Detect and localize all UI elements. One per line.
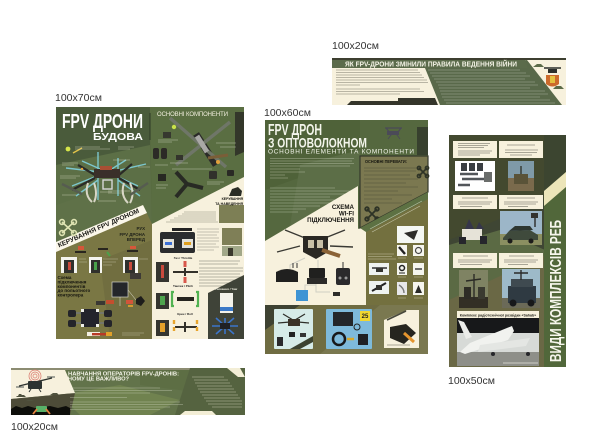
text block: right column (illegible, greeked)	[192, 377, 242, 407]
diagram: radio controller	[160, 228, 195, 253]
heading: forward movement	[119, 226, 146, 242]
corner accent	[235, 112, 244, 156]
heading: poster title	[268, 122, 414, 156]
text block: advice (illegible, greeked)	[199, 261, 243, 286]
panel: main advantages: ОСНОВНІ ПЕРЕВАГИ:	[365, 159, 407, 164]
card: complex 2	[499, 141, 543, 191]
heading: connection diagram: контролера	[58, 293, 84, 298]
heading: connection diagram: до польотного	[58, 288, 90, 293]
diagram: flight controller wiring	[68, 273, 145, 336]
heading: main components: ОСНОВНІ КОМПОНЕНТИ	[157, 112, 228, 118]
heading: vertical title: ВИДИ КОМПЛЕКСІВ РЕБ	[548, 220, 565, 362]
heading: connection diagram	[58, 275, 90, 298]
icon: operator	[229, 187, 242, 196]
heading: Wi-Fi scheme: СХЕМА	[332, 204, 355, 211]
diagram: throttle row: Газ / Throttle	[174, 256, 193, 260]
text block: component captions (illegible, greeked)	[155, 140, 236, 188]
heading: control and guidance: КЕРУВАННЯ	[222, 197, 243, 201]
bar: dark stepped accent	[347, 98, 438, 105]
tile: aircraft close-up	[397, 226, 424, 243]
heading: forward movement: FPV ДРОНА	[119, 232, 146, 237]
icon: X drone	[417, 166, 429, 178]
heading band: ЯК FPV-ДРОНИ ЗМІНИЛИ ПРАВИЛА ВЕДЕННЯ ВІЙНИ	[345, 60, 517, 68]
banner: КЕРУВАННЯ FPV ДРОНОМ: КЕРУВАННЯ FPV ДРОНОМ	[57, 208, 141, 249]
text block: right column (illegible, greeked)	[428, 70, 555, 103]
card: complex 4	[499, 195, 543, 245]
section: cream drone panel	[11, 370, 75, 399]
panel: FPV drone construction poster	[56, 107, 244, 339]
tile: power unit	[384, 310, 419, 348]
icon: controller	[33, 406, 50, 414]
panel: electronic warfare poster	[449, 135, 566, 367]
heading: poster title: ОСНОВНІ ЕЛЕМЕНТИ ТА КОМПОНЕНТИ	[268, 148, 414, 156]
card: complex 3	[453, 195, 497, 244]
diagram: pitch row	[156, 284, 198, 309]
card: complex 1	[453, 141, 497, 191]
panel: FPV fibre-optic drone poster	[265, 120, 429, 354]
diagram: frame and components	[153, 118, 234, 197]
size label: 100x50 poster: 100x50см	[448, 375, 495, 387]
heading: forward movement: РУХ	[136, 226, 145, 231]
tile: drone kit	[274, 309, 313, 349]
size label: 100x60 poster: 100x60см	[264, 107, 311, 119]
section: cream wiring diagram	[265, 186, 366, 305]
photo: operator	[219, 205, 244, 223]
diagram: labelled FPV drone	[62, 147, 148, 203]
text block: left column (illegible, greeked)	[336, 70, 428, 94]
diagram: Wi-Fi wiring	[276, 230, 353, 301]
icon: drone crest	[544, 68, 561, 86]
tile: drone photo 2	[369, 281, 389, 294]
diagram: roll row	[156, 312, 197, 336]
diagram: roll row: Крен / Roll	[177, 312, 193, 316]
heading: Wi-Fi scheme	[307, 204, 355, 224]
icons: clouds	[16, 393, 59, 401]
text block: icon list heading (greeked)	[368, 254, 396, 259]
heading: Wi-Fi scheme: WI-FI	[339, 210, 354, 218]
size label: 100x70 poster: 100x70см	[55, 92, 102, 104]
diagram: pitch row: Тангаж / Pitch	[173, 284, 193, 288]
text block: stick captions (illegible, greeked)	[79, 259, 148, 265]
icon: tanks	[533, 64, 564, 89]
heading: connection diagram: підключення	[58, 279, 87, 284]
corner accent	[417, 127, 428, 155]
text block: body (illegible, greeked)	[70, 388, 183, 410]
diagram: three drones with controller sticks	[61, 246, 138, 273]
tile: drone photo 1	[369, 263, 389, 275]
icon: drone	[385, 128, 402, 139]
card: complex 6	[499, 253, 543, 308]
heading: poster title: FPV ДРОН	[268, 122, 322, 139]
card: drone complex with photo	[457, 311, 539, 366]
heading: training title	[68, 372, 179, 382]
diagram: throttle row	[156, 256, 198, 283]
icon: X drone large	[365, 207, 379, 221]
icon: drone	[16, 377, 55, 392]
text block: controller description (illegible, greeked)	[197, 229, 219, 250]
section: dark panel with skyline	[11, 393, 75, 415]
panel: main advantages	[360, 156, 429, 228]
panel: top banner	[332, 58, 566, 105]
heading: Wi-Fi scheme: ПІДКЛЮЧЕННЯ	[307, 217, 355, 224]
heading: control and guidance: ТА НАВЕДЕННЯ	[215, 202, 243, 206]
cream section	[152, 177, 244, 339]
heading: connection diagram: компонентів	[58, 284, 86, 289]
text block: intro (illegible, greeked)	[270, 158, 354, 212]
panel: yaw control: Рискання / Yaw	[215, 287, 238, 291]
icon: signal rings	[29, 370, 41, 382]
heading: FPV ДРОНИ БУДОВА: FPV ДРОНИ	[62, 111, 143, 133]
panel: bottom banner	[11, 368, 245, 415]
card: complex 5	[453, 253, 497, 308]
photos: operators in field	[222, 228, 242, 256]
panel: yaw control	[208, 275, 244, 339]
heading: connection diagram: Схема	[58, 275, 72, 280]
heading: FPV ДРОНИ БУДОВА	[62, 111, 143, 143]
size label: top banner: 100x20см	[332, 40, 379, 52]
card: drone complex with photo: Комплекс радіотехнічної розвідки «Sahab»	[460, 313, 536, 317]
heading: poster title: З ОПТОВОЛОКНОМ	[268, 134, 367, 150]
heading: forward movement: ВПЕРЕД	[127, 237, 146, 242]
heading: training title: НАВЧАННЯ ОПЕРАТОРІВ FPV-ДРОНІВ:	[68, 372, 179, 378]
heading: control and guidance	[215, 197, 243, 206]
tile: electronics kit	[326, 309, 372, 349]
icon: drone outline	[60, 220, 76, 235]
icons: feature grid	[397, 245, 424, 298]
tile: electronics kit: 25	[362, 314, 369, 320]
heading: FPV ДРОНИ БУДОВА: БУДОВА	[93, 132, 143, 143]
text block: drone callouts (illegible, greeked)	[60, 147, 150, 201]
band: diagonal caption	[360, 192, 428, 232]
heading: training title: ЧОМУ ЦЕ ВАЖЛИВО?	[68, 376, 129, 382]
text block: top article (illegible, greeked)	[166, 212, 218, 222]
